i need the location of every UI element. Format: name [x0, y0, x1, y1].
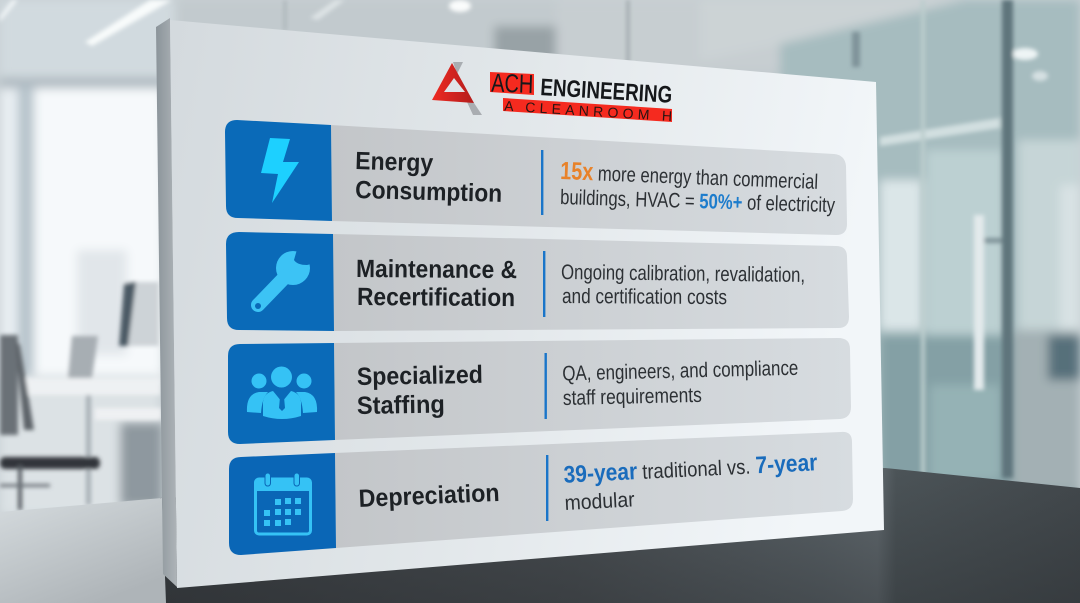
description	[543, 251, 805, 317]
board side edge	[156, 18, 177, 587]
heading: Specialized	[357, 361, 483, 391]
row 3 background	[334, 338, 851, 440]
heading	[356, 255, 517, 312]
heading	[357, 361, 483, 420]
heading: Consumption	[355, 176, 503, 208]
description: modular	[564, 488, 635, 515]
row 1: energy consumption	[225, 120, 847, 235]
table surface	[0, 468, 1080, 603]
board panel	[170, 20, 884, 588]
description	[544, 353, 799, 419]
logo mark: triangle	[432, 62, 482, 115]
top centre	[175, 0, 885, 100]
icon tile: wrench	[226, 232, 334, 331]
logo	[432, 62, 673, 124]
row 3: staffing	[228, 338, 851, 444]
description: Ongoing calibration, revalidation,	[561, 261, 805, 287]
description	[546, 449, 818, 521]
description: and certification costs	[562, 285, 727, 309]
heading: Recertification	[357, 283, 515, 312]
description: 15x more energy than commercial	[560, 157, 819, 195]
description	[541, 150, 836, 217]
row 4: depreciation	[229, 432, 853, 555]
icon tile: calendar	[229, 453, 336, 555]
row 1 background	[331, 125, 847, 235]
icon tile: lightning bolt	[225, 120, 332, 221]
heading: Maintenance &	[356, 255, 517, 284]
row 2 background	[333, 234, 849, 331]
heading: Energy	[355, 147, 434, 177]
description: staff requirements	[563, 384, 702, 410]
heading: Staffing	[357, 390, 445, 420]
row 2: maintenance	[226, 232, 849, 331]
logo text: ACH	[491, 68, 534, 99]
logo text: A CLEANROOM H	[504, 98, 672, 124]
heading: Depreciation	[358, 479, 500, 513]
description: buildings, HVAC = 50%+ of electricity	[560, 186, 836, 217]
left side	[0, 0, 175, 78]
description: 39-year traditional vs. 7-year	[563, 449, 818, 489]
logo text	[490, 68, 673, 124]
logo text: ENGINEERING	[540, 74, 673, 109]
description: QA, engineers, and compliance	[562, 357, 799, 385]
row 4 background	[335, 432, 853, 548]
icon tile: people	[228, 343, 335, 444]
heading	[355, 147, 503, 208]
right side glass wall	[780, 0, 1080, 470]
